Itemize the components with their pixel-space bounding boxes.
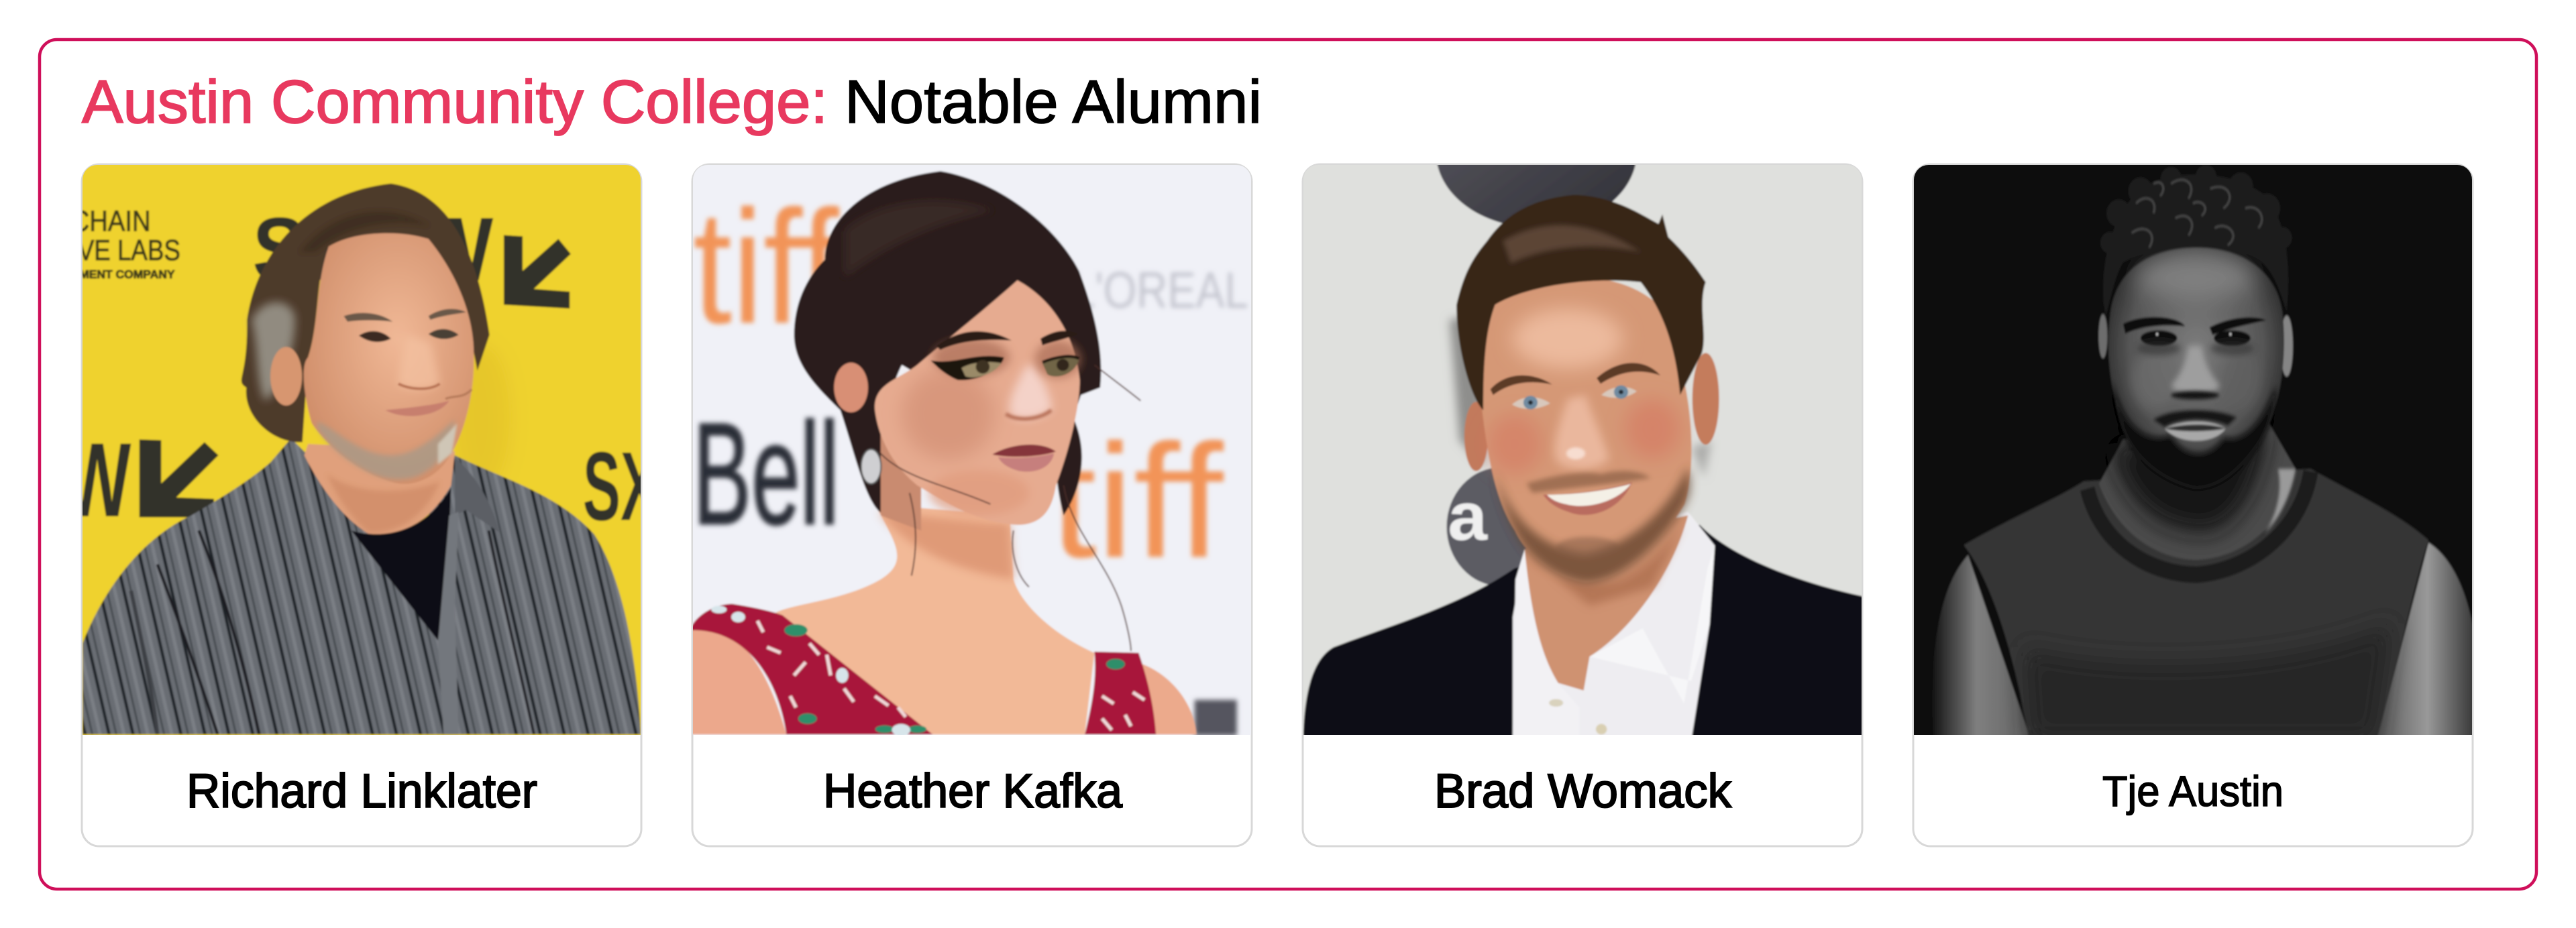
beard: [2112, 380, 2276, 489]
title: [82, 68, 1262, 136]
earring: [861, 449, 881, 484]
brows: [1491, 375, 1552, 395]
photo: Richard Linklater: SX: [583, 431, 658, 540]
hair: [794, 171, 1101, 516]
shirt: [83, 440, 641, 735]
photo: Brad Womack: [1290, 77, 1873, 749]
ears: [1693, 353, 1719, 445]
photo: Brad Womack: a: [1448, 478, 1489, 555]
dress: [690, 604, 1156, 736]
neck: [305, 444, 455, 534]
face: [2108, 247, 2284, 486]
collar: [2087, 471, 2311, 575]
collar: [271, 440, 292, 462]
photo: Richard Linklater: SXSW: [252, 198, 493, 300]
back of neck: [881, 418, 921, 530]
card: Brad Womack: [1290, 77, 1873, 846]
photo: Richard Linklater: W: [63, 422, 131, 539]
photo: Tje Austin: [1905, 154, 2481, 744]
name: Heather Kafka: Heather Kafka: [823, 765, 1123, 818]
photo: Richard Linklater: [83, 165, 641, 735]
title: Austin Community College:: [82, 68, 828, 136]
name: Richard Linklater: Richard Linklater: [186, 765, 537, 818]
neck: [1525, 516, 1688, 691]
photo: Richard Linklater: NMENT COMPANY: [71, 268, 175, 281]
ear: [270, 347, 302, 406]
photo: Heather Kafka: L'OREAL: [1071, 263, 1248, 319]
features: [932, 339, 1010, 376]
features: [343, 313, 392, 322]
ear: [834, 363, 868, 412]
photo: Richard Linklater: IVE LABS: [71, 234, 180, 267]
chest and neck: [775, 504, 1094, 734]
name: Brad Womack: Brad Womack: [1434, 765, 1731, 818]
card: Richard Linklater: [60, 147, 662, 846]
face: [875, 280, 1080, 525]
undershirt: [352, 487, 451, 640]
shoulders: [690, 628, 786, 734]
hair: [2100, 165, 2292, 316]
photo: Richard Linklater: CHAIN: [71, 205, 151, 237]
jacket: [1303, 525, 1863, 741]
neck: [2099, 420, 2296, 560]
title: Notable Alumni: [845, 68, 1262, 136]
stubble: [1495, 467, 1690, 583]
eyes: [1512, 397, 1550, 409]
collar: [1513, 549, 1580, 741]
shirt: [1513, 512, 1715, 741]
hair: [1456, 195, 1706, 410]
photo: Heather Kafka: [693, 165, 1251, 735]
arms: [1932, 555, 2031, 742]
photo: Heather Kafka: tiff: [693, 176, 840, 357]
ears: [2281, 316, 2293, 376]
backdrop logos: [1436, 77, 1637, 227]
photo: Heather Kafka: Bell: [693, 393, 839, 555]
face: [1481, 278, 1692, 583]
stubble: [317, 420, 455, 479]
card: Tje Austin: [1905, 154, 2481, 846]
face: [304, 233, 474, 484]
hair back: [241, 184, 490, 442]
name: Tje Austin: Tje Austin: [2102, 767, 2284, 815]
tank top: [1964, 469, 2428, 742]
stray hair: [879, 365, 1140, 651]
mouth: [1543, 482, 1632, 515]
photo: Heather Kafka: tiff: [1050, 410, 1224, 591]
card: Heather Kafka: [678, 147, 1271, 846]
features: [2123, 317, 2185, 334]
